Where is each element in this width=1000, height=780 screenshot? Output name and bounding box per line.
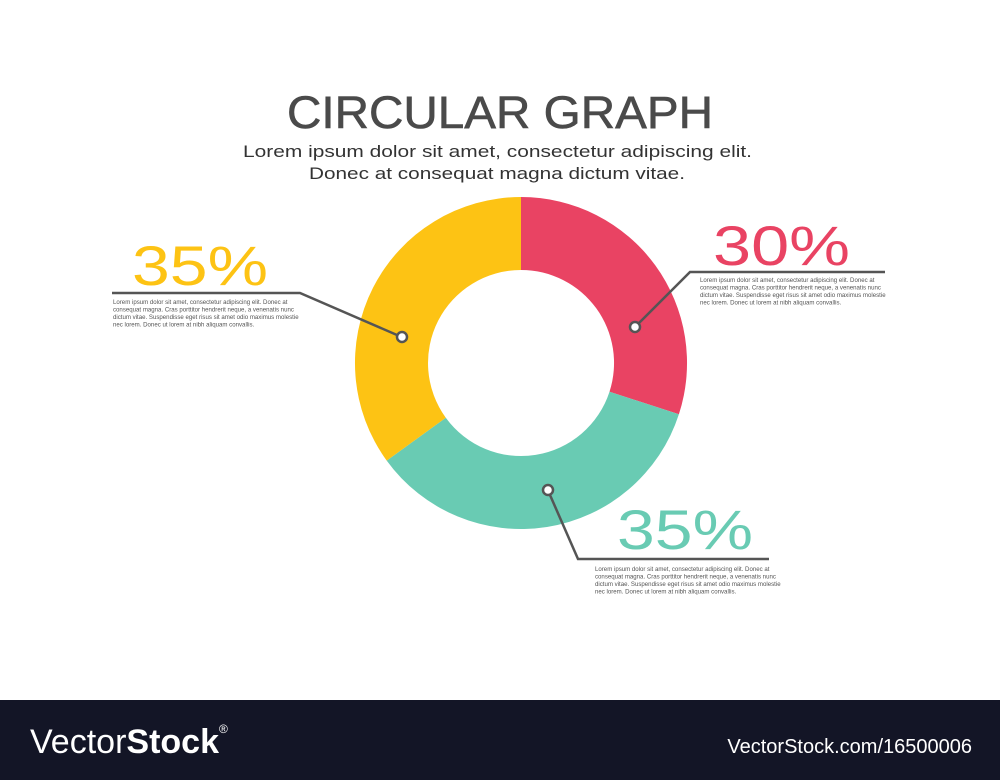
subtitle: Lorem ipsum dolor sit amet, consectetur adipiscing elit. xyxy=(243,142,752,161)
callout: left yellow 35%: Lorem ipsum dolor sit amet, consectetur adipiscing elit. Donec at xyxy=(113,299,288,306)
footer bar xyxy=(0,700,1000,780)
segment: red 30% xyxy=(521,197,687,414)
callout: right red 30% xyxy=(630,214,886,332)
title: CIRCULAR GRAPH xyxy=(287,87,713,138)
callout: bottom teal 35%: consequat magna. Cras porttitor hendrerit neque, a venenatis nunc xyxy=(595,574,776,580)
callout: bottom teal 35%: dictum vitae. Suspendisse eget risus sit amet odio maximus molestie xyxy=(595,581,781,588)
footer logo: ® xyxy=(219,722,228,736)
callout: right red 30%: dictum vitae. Suspendisse eget risus sit amet odio maximus molestie xyxy=(700,292,886,299)
callout: bottom teal 35% xyxy=(543,485,781,596)
donut chart xyxy=(355,197,687,529)
callout: bottom teal 35%: 35% xyxy=(617,498,753,561)
callout: right red 30%: consequat magna. Cras porttitor hendrerit neque, a venenatis nunc xyxy=(700,284,881,292)
callout: left yellow 35%: dictum vitae. Suspendisse eget risus sit amet odio maximus molestie xyxy=(113,314,299,321)
callout: bottom teal 35%: Lorem ipsum dolor sit amet, consectetur adipiscing elit. Donec at xyxy=(595,566,770,573)
segment: yellow 35% xyxy=(355,197,521,461)
subtitle xyxy=(243,142,752,183)
callout: right red 30%: Lorem ipsum dolor sit amet, consectetur adipiscing elit. Donec at xyxy=(700,277,875,284)
callout: left yellow 35% xyxy=(112,234,407,342)
callout: right red 30%: 30% xyxy=(713,214,850,277)
callout: bottom teal 35%: nec lorem. Donec ut lorem at nibh aliquam convallis. xyxy=(595,588,737,596)
footer logo: VectorStock xyxy=(30,723,219,761)
segment: teal 35% xyxy=(387,392,679,529)
footer url: VectorStock.com/16500006 xyxy=(727,736,972,758)
callout: left yellow 35%: consequat magna. Cras porttitor hendrerit neque, a venenatis nunc xyxy=(113,306,294,314)
callout: right red 30%: nec lorem. Donec ut lorem at nibh aliquam convallis. xyxy=(700,300,842,306)
callout: left yellow 35%: nec lorem. Donec ut lorem at nibh aliquam convallis. xyxy=(113,322,255,328)
subtitle: Donec at consequat magna dictum vitae. xyxy=(309,164,685,183)
callout: left yellow 35%: 35% xyxy=(132,234,268,297)
